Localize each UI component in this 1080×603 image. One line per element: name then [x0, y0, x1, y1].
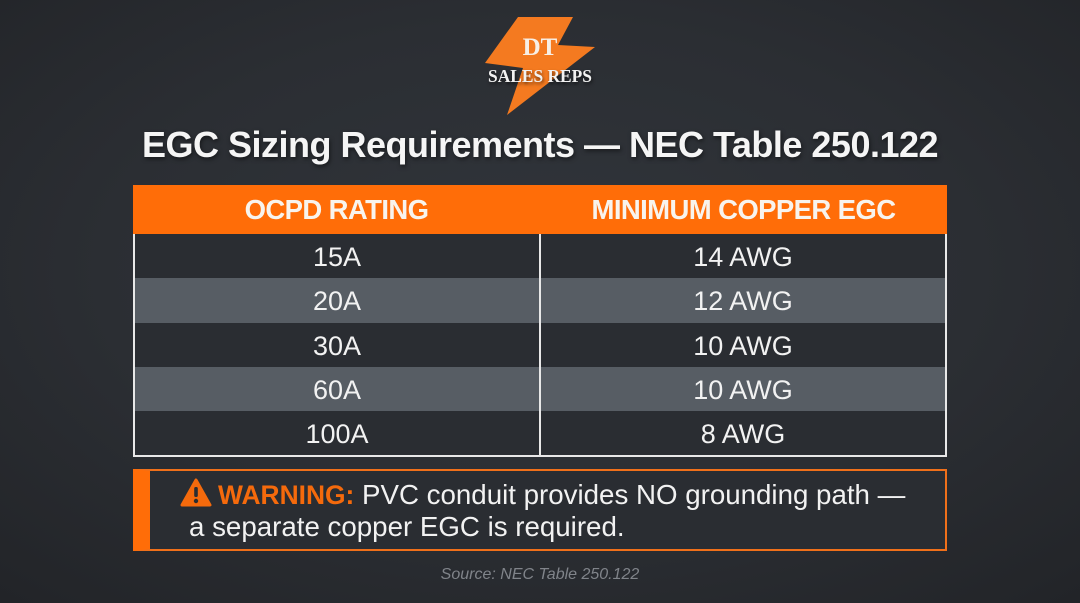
table rows: 8 AWG	[701, 419, 785, 449]
warning text: WARNING: PVC conduit provides NO grounding path —	[218, 479, 905, 510]
table rows: 20A	[313, 286, 361, 316]
table rows	[133, 234, 947, 457]
table rows: 10 AWG	[693, 331, 793, 361]
table rows: 15A	[313, 242, 361, 272]
source note: Source: NEC Table 250.122	[441, 566, 639, 583]
title: EGC Sizing Requirements — NEC Table 250.122	[142, 124, 938, 165]
table header	[133, 185, 947, 234]
warning text: a separate copper EGC is required.	[189, 511, 625, 542]
table rows: 100A	[305, 419, 369, 449]
table rows: 60A	[313, 375, 361, 405]
warning text	[189, 479, 906, 542]
table	[133, 185, 947, 457]
logo: DT Sales Reps lightning bolt: SALES REPS	[488, 66, 592, 86]
table rows: 10 AWG	[693, 375, 793, 405]
logo: DT Sales Reps lightning bolt: DT	[523, 34, 557, 61]
icon: warning triangle	[180, 478, 212, 506]
table header: MINIMUM COPPER EGC	[592, 194, 895, 225]
table rows: 30A	[313, 331, 361, 361]
table rows: 12 AWG	[693, 286, 793, 316]
table header: OCPD RATING	[245, 194, 428, 225]
warning callout	[133, 469, 947, 551]
logo: DT Sales Reps lightning bolt	[485, 17, 595, 115]
table rows: 14 AWG	[693, 242, 793, 272]
